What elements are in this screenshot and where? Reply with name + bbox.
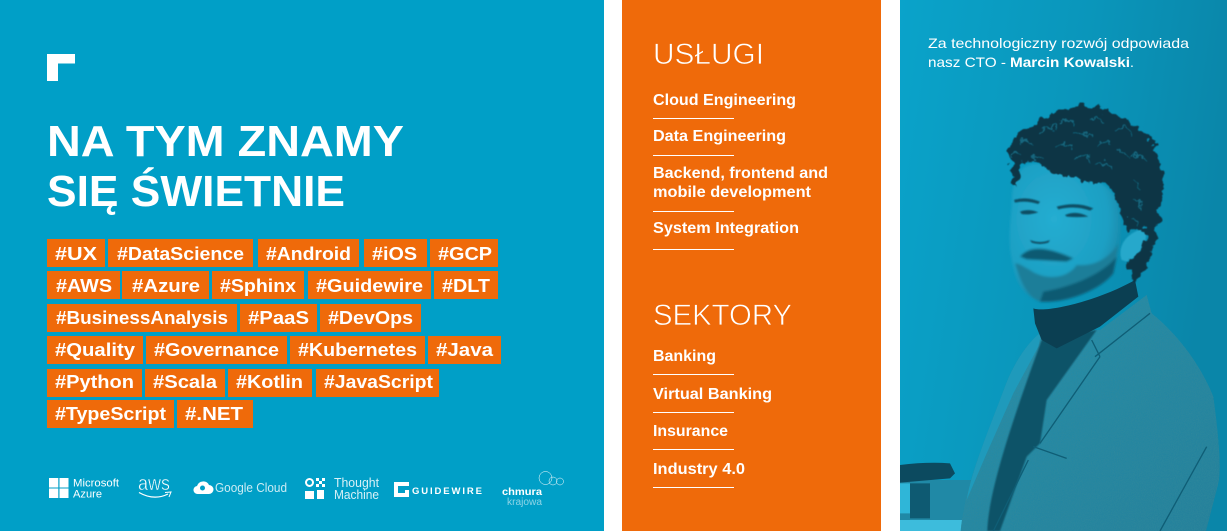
ear [1120,228,1146,262]
logo: Thought Machine: Thought [334,475,379,490]
list: sectors: Insurance [653,423,728,440]
list: services: Data Engineering [653,128,786,145]
eyes and brows [1014,198,1093,244]
logo: Microsoft Azure: Azure [73,488,102,500]
tag row 4: #Quality [55,340,135,360]
caption: Za technologiczny rozwój odpowiada [928,35,1189,51]
tag cloud [47,239,501,428]
caption: Marcin Kowalski [1010,54,1130,70]
logo: Thought Machine: Machine [334,487,379,502]
lighter left lapel [967,332,1042,500]
tag row 1: #UX [55,244,97,264]
tag row 1: #DataScience [117,244,244,264]
tag row 5: #JavaScript [324,372,433,392]
panel: CTO portrait [900,0,1227,531]
tag row 2: #DLT [442,276,490,296]
list: sectors: Banking [653,348,716,365]
tag row 2: #Guidewire [316,276,423,296]
logo: Thought Machine [305,475,379,502]
turtleneck [1033,280,1138,348]
dark sweater [987,330,1097,531]
portrait illustration [900,102,1220,531]
caption [928,35,1189,70]
list: sectors [653,348,772,488]
list: sectors: Virtual Banking [653,386,772,403]
tag row 4 [47,336,501,364]
tag row 6 [47,400,253,428]
heading: sectors: SEKTORY [653,299,792,332]
heading: services: USŁUGI [653,38,764,71]
panel: orange services panel [622,0,881,531]
title: NA TYM ZNAMY [47,117,404,166]
tag row 3: #BusinessAnalysis [56,308,228,328]
tag row 1: #Android [266,244,351,264]
tag row 3: #DevOps [328,308,413,328]
tag row 3: #PaaS [248,308,309,328]
logo: Google Cloud: Google Cloud [215,481,287,495]
hair [1009,106,1163,281]
list: services [653,92,828,250]
tag row 1: #GCP [438,244,492,264]
tag row 2: #Azure [132,276,200,296]
caption: nasz CTO - [928,54,1006,70]
tag row 1: #iOS [372,244,417,264]
tag row 2: #AWS [56,276,112,296]
logo: Microsoft Azure: Microsoft [73,478,119,490]
tag row 6: #.NET [185,404,243,424]
lapel lines [993,313,1207,531]
tag row 2 [47,271,498,299]
moustache and mouth [1020,249,1073,262]
tag row 1 [47,239,498,267]
tag row 4: #Kubernetes [298,340,417,360]
title [47,117,404,216]
tag row 5 [47,369,439,397]
face [1010,164,1121,302]
logo: chmura krajowa: krajowa [507,497,542,508]
background objects [900,463,972,531]
logo: Microsoft Azure [49,478,119,500]
tag row 3 [47,304,421,332]
hair curls [1012,118,1145,225]
logo: chmura krajowa [502,472,564,508]
jacket [961,295,1220,531]
title: SIĘ ŚWIETNIE [47,166,345,216]
logo: Guidewire: GUIDEWIRE [412,486,482,497]
list: services: Cloud Engineering [653,92,796,109]
tag row 5: #Kotlin [236,372,303,392]
list: services: System Integration [653,220,799,237]
logo: chmura krajowa: chmura [502,487,542,498]
caption: . [1130,54,1134,70]
icon: corner logo mark [47,54,75,81]
tag row 5: #Scala [153,372,218,392]
list: sectors: Industry 4.0 [653,461,745,478]
tag row 4: #Governance [154,340,279,360]
tag row 2: #Sphinx [220,276,296,296]
list: services: Backend, frontend and [653,165,828,182]
panel: blue skills panel [0,0,604,531]
logo: AWS: aws [138,473,170,495]
list: services: mobile development [653,184,811,201]
tag row 6: #TypeScript [55,404,166,424]
tag row 4: #Java [436,340,494,360]
tag row 5: #Python [55,372,134,392]
logo: Guidewire [394,482,482,497]
beard [1015,243,1118,302]
